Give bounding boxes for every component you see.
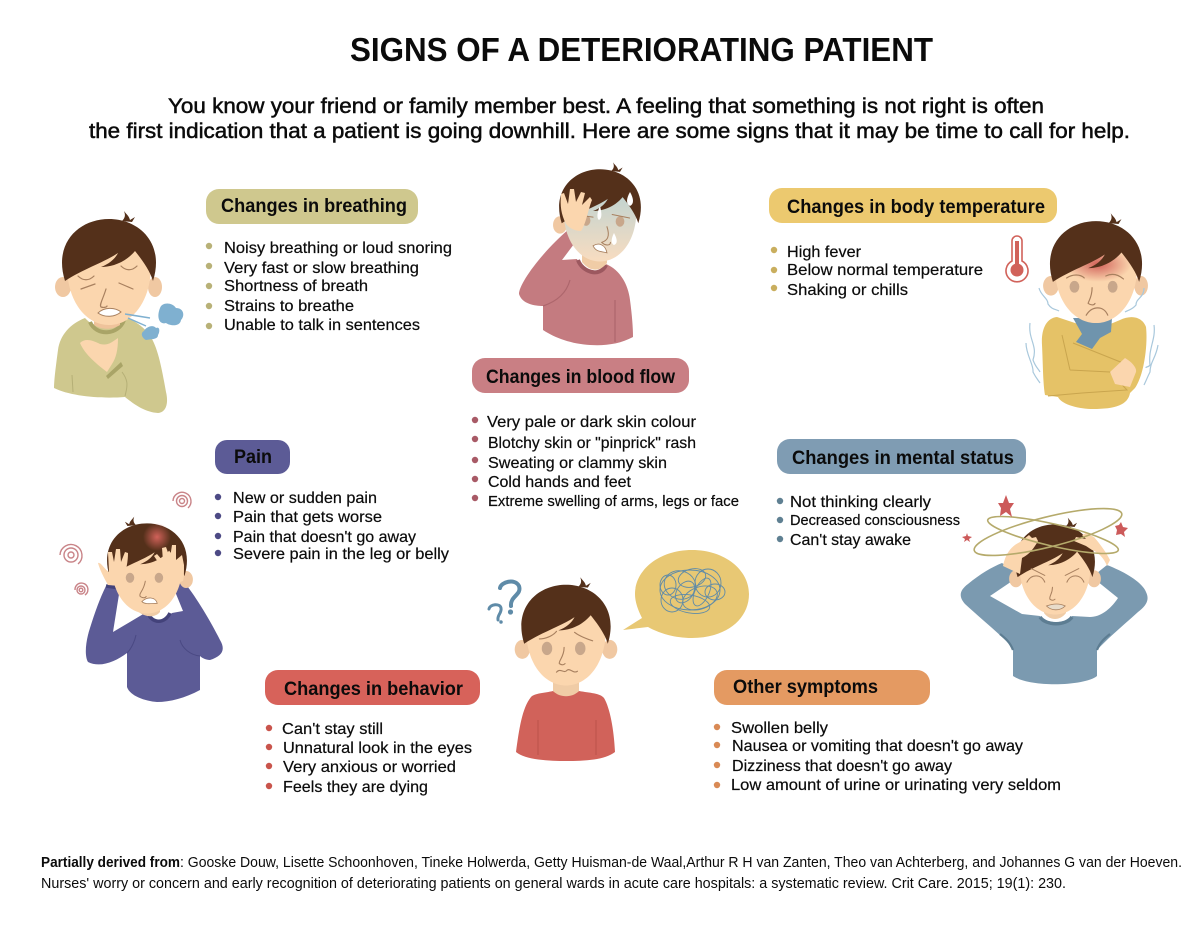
list: blood flow signs	[472, 414, 739, 510]
illustration: boy with hand on chest	[54, 211, 183, 413]
list: mental status signs: Not thinking clearly	[790, 494, 931, 511]
list: mental status signs: Can't stay awake	[790, 532, 911, 549]
list: breathing signs	[206, 240, 452, 334]
list: pain signs: Severe pain in the leg or belly	[233, 546, 449, 563]
list: mental status signs: Decreased consciousness	[790, 512, 960, 529]
list: other symptoms: Dizziness that doesn't go away	[732, 758, 952, 775]
heading: changes in body temperature: Changes in body temperature	[787, 197, 1045, 218]
panel: other symptoms	[714, 670, 1061, 794]
list: other symptoms: Low amount of urine or urinating very seldom	[731, 777, 1061, 794]
list: breathing signs: Strains to breathe	[224, 298, 354, 315]
intro text	[89, 95, 1130, 143]
illustration: pale sweating boy	[519, 162, 641, 345]
panel: pain	[60, 440, 449, 702]
heading: pain: Pain	[234, 447, 272, 468]
heading: changes in behavior: Changes in behavior	[284, 679, 464, 700]
panel: changes in breathing	[54, 189, 452, 413]
footer citation: Nurses' worry or concern and early recognition of deteriorating patients on general wards in acute care hospitals: a systematic review. Crit Care. 2015; 19(1): 230.	[41, 876, 1066, 892]
title: SIGNS OF A DETERIORATING PATIENT	[350, 31, 933, 68]
heading: changes in mental status	[777, 439, 1026, 474]
heading: changes in blood flow	[472, 358, 689, 393]
list: pain signs: Pain that doesn't go away	[233, 529, 416, 546]
panel: changes in blood flow	[472, 162, 739, 510]
list: temperature signs	[771, 244, 983, 299]
list: temperature signs: Below normal temperature	[787, 262, 983, 279]
list: other symptoms: Swollen belly	[731, 720, 828, 737]
list: breathing signs: Noisy breathing or loud snoring	[224, 240, 452, 257]
list: behavior signs: Very anxious or worried	[283, 759, 456, 776]
heading: changes in breathing	[206, 189, 418, 224]
list: blood flow signs: Very pale or dark skin colour	[487, 414, 697, 431]
heading: other symptoms: Other symptoms	[733, 677, 878, 698]
list: blood flow signs: Sweating or clammy skin	[488, 455, 667, 472]
icon: pain spirals	[60, 492, 191, 595]
illustration: shivering boy with scarf	[1026, 213, 1158, 409]
list: temperature signs: Shaking or chills	[787, 282, 908, 299]
footer citation: Partially derived from	[41, 855, 180, 871]
heading: pain	[215, 440, 290, 474]
heading: changes in breathing: Changes in breathing	[221, 196, 407, 217]
heading: changes in body temperature	[769, 188, 1057, 223]
list: other symptoms	[714, 720, 1061, 794]
list: other symptoms: Nausea or vomiting that doesn't go away	[732, 738, 1023, 755]
footer citation: : Gooske Douw, Lisette Schoonhoven, Tineke Holwerda, Getty Huisman-de Waal,Arthur R H van Zanten, Theo van Achterberg, and Johannes G van der Hoeven.	[180, 855, 1182, 871]
panel: changes in behavior	[265, 550, 749, 796]
list: blood flow signs: Extreme swelling of arms, legs or face	[488, 493, 739, 510]
list: blood flow signs: Blotchy skin or "pinprick" rash	[488, 435, 696, 452]
list: behavior signs: Unnatural look in the eyes	[283, 740, 472, 757]
illustration: dizzy boy with stars	[961, 495, 1148, 684]
list: mental status signs	[777, 494, 960, 549]
panel: changes in mental status	[777, 439, 1148, 684]
illustration: worried boy	[515, 577, 617, 761]
icon: thermometer	[1006, 236, 1028, 282]
list: behavior signs: Can't stay still	[282, 721, 383, 738]
heading: changes in behavior	[265, 670, 480, 705]
list: breathing signs: Unable to talk in sentences	[224, 317, 420, 334]
icon: speech bubble with tangled scribble	[623, 550, 749, 638]
list: pain signs: New or sudden pain	[233, 490, 377, 507]
list: temperature signs: High fever	[787, 244, 862, 261]
list: breathing signs: Shortness of breath	[224, 278, 368, 295]
list: breathing signs: Very fast or slow breathing	[224, 260, 419, 277]
list: behavior signs	[266, 721, 472, 796]
heading: changes in mental status: Changes in mental status	[792, 448, 1014, 469]
list: behavior signs: Feels they are dying	[283, 779, 428, 796]
footer citation	[41, 855, 1182, 892]
panel: changes in body temperature	[769, 188, 1158, 409]
list: blood flow signs: Cold hands and feet	[488, 474, 632, 491]
intro text: You know your friend or family member best. A feeling that something is not right is often	[168, 95, 1044, 118]
list: pain signs	[215, 490, 449, 563]
heading: other symptoms	[714, 670, 930, 705]
icon: question marks	[489, 582, 519, 623]
heading: changes in blood flow: Changes in blood flow	[486, 367, 675, 388]
list: pain signs: Pain that gets worse	[233, 509, 382, 526]
intro text: the first indication that a patient is going downhill. Here are some signs that it may be time to call for help.	[89, 120, 1130, 143]
illustration: boy holding head in pain	[60, 492, 223, 702]
